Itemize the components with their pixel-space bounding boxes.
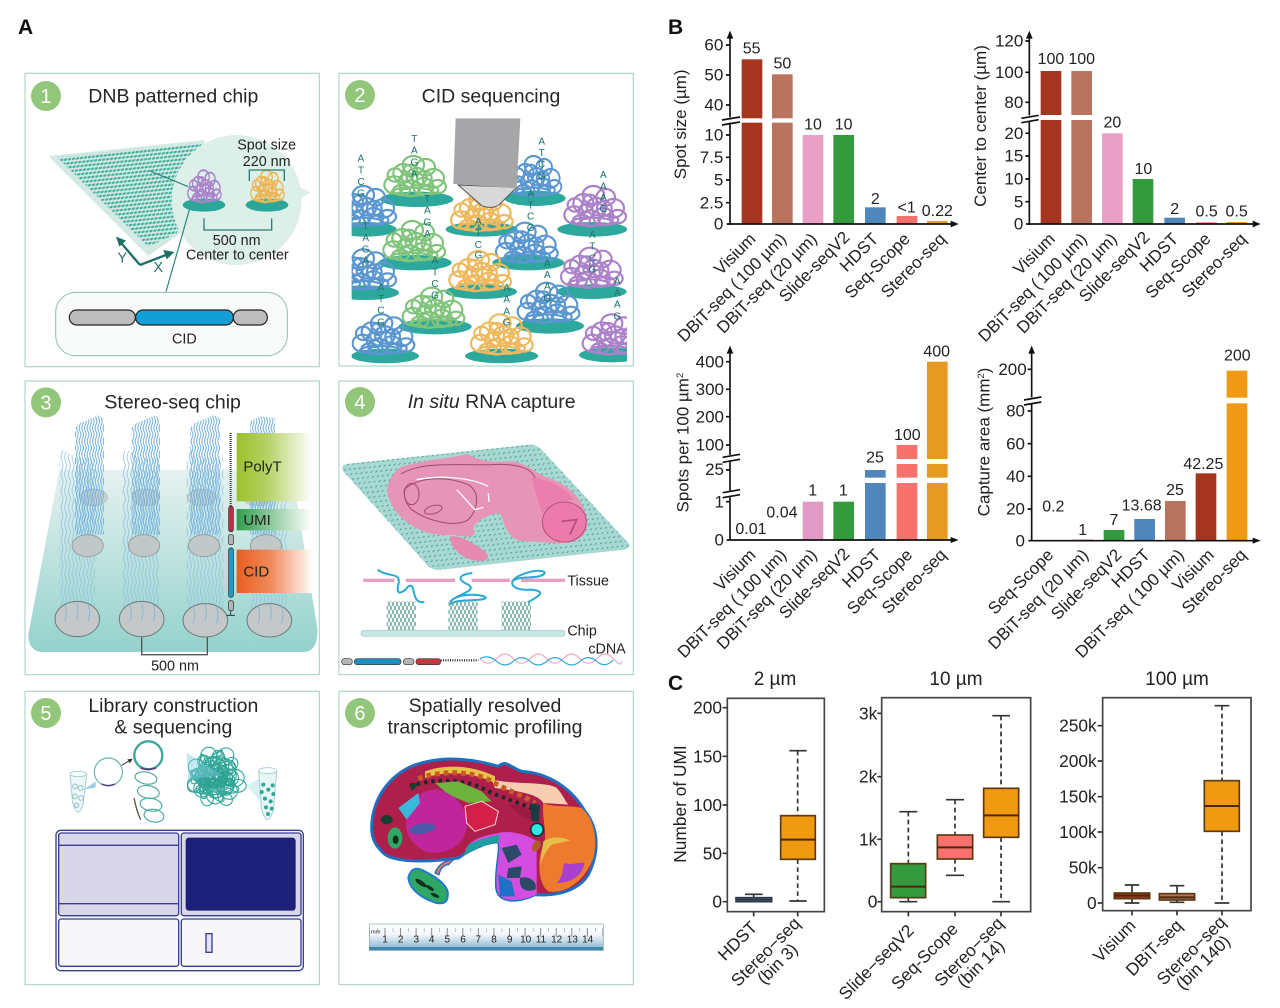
y tick labels: 60: [1006, 434, 1025, 453]
capture probes: [387, 601, 531, 631]
y tick labels: 7.5: [700, 148, 723, 167]
centre to centre label: 500 nm: [213, 233, 261, 249]
value labels: 55: [743, 41, 761, 58]
y tick labels: 2.5: [700, 193, 723, 212]
y tick labels: [1059, 716, 1097, 913]
category labels: (bin 14): [953, 936, 1008, 991]
magnified lens: [172, 135, 311, 265]
category labels: [674, 544, 950, 662]
CID oligo box: CID: [172, 331, 197, 347]
y tick labels: 5: [714, 171, 723, 190]
y tick labels: 20: [1006, 500, 1025, 519]
title: & sequencing: [114, 717, 232, 739]
y tick labels: 50: [704, 66, 723, 85]
axes: [1024, 346, 1261, 544]
value labels: 0.5: [1226, 204, 1248, 221]
DNB clusters with base letters: ATCG: [474, 217, 482, 262]
DNB clusters with base letters: TAGA: [362, 221, 370, 267]
step badge 3: 3: [40, 392, 52, 414]
category labels: HDST: [1108, 545, 1154, 592]
y tick labels: 200: [696, 407, 724, 426]
box plot: 100 um: [1059, 669, 1251, 1001]
step badge 6: [345, 698, 375, 728]
pointer lines: [150, 171, 192, 292]
value labels: 2: [1170, 201, 1179, 218]
ruler: 7: [476, 935, 482, 946]
DNB clusters with base letters: ATCG: [538, 136, 546, 183]
sequencing objective lens: [453, 118, 520, 207]
y tick labels: 0: [1087, 893, 1097, 913]
bar chart: center to center: [971, 31, 1261, 346]
DNB clusters with base letters: ATCG: [588, 230, 596, 276]
step badge 2: [345, 80, 375, 110]
Seq-Scope box: [937, 800, 973, 875]
value labels: 10: [804, 116, 822, 133]
value labels: 2: [871, 191, 880, 208]
axes: [722, 31, 959, 227]
title: In situ RNA capture: [408, 391, 576, 413]
category labels: Visium: [1169, 545, 1218, 595]
y axis title: Capture area (mm: [974, 379, 993, 516]
y tick labels: [696, 352, 724, 550]
DNB clusters with base letters: ATCG: [527, 189, 535, 234]
category labels: DBiT-seq (20 µm): [713, 229, 821, 337]
bar chart: capture area: [974, 346, 1261, 662]
mid row spots: [72, 535, 282, 557]
arrow to rolling circle: [122, 759, 133, 765]
sequencing flow cell: [56, 830, 303, 971]
ruler: 14: [582, 935, 594, 946]
panel 1: DNB patterned chip: [25, 73, 319, 367]
box plot: 2 um: [693, 669, 824, 1002]
light capture strands: [59, 450, 287, 611]
y tick labels: [995, 32, 1023, 234]
PolyT label: [237, 433, 312, 501]
strands on front spots: [65, 603, 283, 623]
orange DNB on spot: [246, 170, 288, 212]
step badge 3: [31, 387, 61, 417]
category labels: Visium: [710, 545, 759, 595]
value labels: [1042, 348, 1251, 539]
captured RNA strands: [378, 570, 545, 605]
y tick labels: 2k: [859, 767, 878, 787]
XY axes arrows: [116, 237, 174, 265]
y tick labels: 3k: [859, 703, 878, 723]
Stereo-seq bin 14 box: [984, 716, 1019, 902]
category labels: Stereo-seq: [877, 229, 949, 302]
category labels: Slide-seqV2: [1047, 545, 1125, 624]
category labels: Seq-Scope: [1142, 229, 1214, 302]
value labels: 400: [923, 344, 950, 361]
category labels: DBiT-seq (100 µm): [674, 545, 790, 662]
panel 2: CID sequencing: [331, 73, 644, 366]
title: transcriptomic profiling: [388, 717, 582, 739]
category labels: Stereo-seq: [1178, 545, 1250, 618]
y axis title: Spots per 100 µm: [673, 378, 692, 512]
category labels: HDST: [1136, 229, 1182, 276]
y tick labels: [693, 698, 722, 912]
centre to centre label: [186, 218, 289, 263]
category labels: [1089, 912, 1241, 1001]
category labels: Stereo−seq: [727, 913, 804, 990]
bars: [803, 362, 950, 540]
Stereo-seq bin 140 box: [1204, 706, 1239, 903]
y tick labels: 100: [693, 795, 722, 815]
value labels: 20: [1103, 115, 1121, 132]
DNB clusters with base letters: [331, 134, 644, 363]
category labels: DBiT-seq (20 µm): [713, 545, 821, 653]
value labels: 10: [1134, 161, 1152, 178]
value labels: 100: [1038, 51, 1064, 68]
small circle template: [94, 758, 122, 786]
value labels: 1: [839, 482, 848, 499]
category labels: [674, 228, 949, 346]
y tick labels: 60: [704, 36, 723, 55]
UMI label: UMI: [243, 512, 271, 529]
bars: [740, 59, 948, 224]
category labels: Stereo−seq: [930, 913, 1007, 990]
category labels: DBiT-seq (20 µm): [984, 545, 1092, 653]
panel letter B: B: [668, 16, 683, 39]
ruler: 12: [551, 935, 563, 946]
y tick labels: 1k: [859, 829, 878, 849]
category labels: [714, 913, 816, 1002]
panel letter C: C: [668, 672, 683, 695]
panel letter A: A: [18, 16, 33, 39]
Stereo-seq bin 3 box: [781, 751, 815, 901]
box plots: number of UMI: [670, 669, 1251, 1004]
step badge 5: [31, 698, 61, 728]
y tick labels: 50k: [1069, 858, 1097, 878]
value labels: 100: [1068, 51, 1095, 68]
DNB clusters with base letters: TAGA: [410, 134, 418, 180]
y tick labels: [998, 360, 1027, 550]
bar chart: spots per 100 um2: [673, 344, 959, 662]
rolling circle product: [134, 741, 165, 824]
bars: [1039, 71, 1247, 224]
CID oligo box: [56, 292, 287, 356]
cDNA structure: [342, 654, 622, 665]
step badge 4: [345, 387, 375, 417]
oligo structure strand: [227, 433, 235, 615]
y tick labels: 400: [696, 352, 724, 371]
tissue layer line: [363, 575, 565, 585]
axes: [1021, 31, 1261, 227]
UMI label: [237, 509, 312, 530]
bars: [1073, 371, 1250, 541]
DNB clusters with base letters: AAAG: [543, 258, 551, 304]
ruler: 13: [567, 935, 578, 946]
category labels: Stereo−seq: [1153, 912, 1230, 989]
value labels: 100: [894, 427, 921, 444]
value labels: [743, 41, 953, 220]
500 nm bracket: [142, 637, 207, 674]
value labels: 10: [835, 116, 853, 133]
value labels: <1: [898, 200, 916, 217]
tissue section: [387, 454, 587, 561]
DNB clusters with base letters: ATCG: [357, 154, 365, 199]
DNB clusters with base letters: AAAG: [599, 170, 607, 215]
centre to centre label: Center to center: [186, 247, 289, 263]
y tick labels: 10: [704, 126, 723, 145]
y tick labels: 0: [1016, 531, 1025, 550]
y tick labels: 80: [1006, 402, 1025, 421]
y tick labels: 25: [705, 460, 724, 479]
y tick labels: 100: [696, 436, 724, 455]
ruler: 11: [536, 935, 547, 946]
category labels: Seq-Scope: [984, 545, 1057, 618]
HDST box: [736, 894, 772, 902]
DNB clusters with base letters: AAAG: [613, 276, 621, 322]
y tick labels: 40: [704, 96, 723, 115]
category labels: HDST: [714, 917, 761, 965]
title: [388, 695, 582, 739]
ruler: 6: [460, 935, 466, 946]
title: DNB patterned chip: [88, 85, 259, 107]
chip surface: [28, 470, 317, 652]
subplot title: 2 µm: [754, 669, 796, 690]
category labels: Visium: [1010, 229, 1059, 279]
bar chart: spot size: [671, 31, 959, 346]
category labels: Stereo-seq: [878, 545, 950, 618]
value labels: 25: [866, 450, 884, 467]
y axis title: ): [974, 368, 993, 373]
value labels: 1: [808, 482, 817, 499]
chip surface: [48, 140, 205, 256]
step badge 6: 6: [354, 703, 366, 725]
cDNA label: cDNA: [588, 641, 626, 657]
spatial embryo map: [372, 759, 596, 900]
ruler: 1: [382, 935, 388, 946]
category labels: Slide−seqV2: [835, 920, 918, 1004]
CID label: [237, 550, 313, 593]
spot size label: 220 nm: [243, 154, 291, 170]
subplot title: 10 µm: [929, 669, 983, 690]
CID label: CID: [243, 564, 269, 581]
category labels: HDST: [836, 229, 882, 276]
category labels: (bin 140): [1172, 931, 1234, 993]
y tick labels: 0: [712, 892, 722, 912]
category labels: Visium: [1089, 915, 1139, 966]
title: Spatially resolved: [409, 695, 561, 717]
y tick labels: 5: [1014, 192, 1023, 211]
value labels: 42.25: [1183, 456, 1223, 473]
axis label Y: Y: [118, 251, 128, 267]
spot size label: [237, 137, 296, 181]
DBiT-seq box: [1159, 886, 1195, 902]
axes: [723, 346, 959, 543]
ruler: 9: [507, 935, 513, 946]
y tick labels: 50: [703, 843, 722, 863]
title: [88, 695, 258, 739]
ruler: mm: [371, 929, 381, 935]
y axis title: 2: [976, 373, 986, 379]
value labels: 0.04: [766, 505, 798, 522]
value labels: 0.5: [1196, 204, 1218, 221]
value labels: 50: [773, 56, 791, 73]
y axis title: Number of UMI: [670, 745, 690, 863]
ruler: [369, 924, 603, 950]
back row spots: [79, 489, 271, 506]
Slide-seqV2 box: [891, 812, 926, 902]
y tick labels: 40: [1006, 467, 1025, 486]
DNB ball: [183, 742, 251, 811]
y tick labels: 1: [715, 492, 724, 511]
value labels: 1: [1078, 522, 1087, 539]
category labels: [835, 913, 1019, 1004]
chip bar: [361, 630, 565, 636]
y tick labels: 200: [998, 360, 1027, 379]
category labels: [984, 545, 1250, 662]
ruler: 2: [398, 935, 404, 946]
dense capture strands: [75, 415, 277, 535]
y tick labels: 0: [868, 892, 877, 912]
value labels: 0.01: [735, 521, 767, 538]
ruler: 5: [445, 935, 451, 946]
category labels: Stereo-seq: [1178, 229, 1250, 302]
category labels: DBiT-seq: [1122, 915, 1186, 980]
DNB clusters with base letters: ATCG: [377, 282, 385, 328]
panel 3: Stereo-seq chip: [25, 381, 319, 675]
y axis title: Spot size (µm): [671, 69, 690, 179]
chip with spots: [342, 445, 629, 570]
value labels: 13.68: [1122, 498, 1162, 515]
y tick labels: 20: [1004, 124, 1023, 143]
panel 6: spatially resolved transcriptomic profiling: [339, 691, 633, 985]
ruler: 3: [414, 935, 420, 946]
step badge 2: 2: [354, 85, 366, 107]
panel 4: in situ RNA capture: [339, 381, 633, 675]
category labels: Slide-seqV2: [775, 544, 853, 623]
y tick labels: 10: [1004, 170, 1023, 189]
purple DNB on spot: [183, 170, 225, 212]
axis label X: X: [154, 260, 164, 276]
right tube: [247, 768, 277, 820]
y tick labels: 300: [696, 380, 724, 399]
category labels: HDST: [838, 545, 884, 592]
y tick labels: 0: [1014, 215, 1023, 234]
step badge 4: 4: [354, 392, 366, 414]
step badge 1: 1: [40, 86, 52, 108]
category labels: DBiT-seq (100 µm): [974, 229, 1091, 346]
category labels: Seq-Scope: [887, 919, 962, 993]
value labels: 0.2: [1042, 499, 1065, 516]
category labels: DBiT-seq (100 µm): [674, 229, 790, 346]
y tick labels: 80: [1004, 93, 1023, 112]
y tick labels: 150: [693, 746, 722, 766]
y tick labels: 100: [995, 63, 1023, 82]
DNB clusters with base letters: AAAG: [503, 283, 511, 328]
title: CID sequencing: [422, 85, 560, 107]
PolyT label: PolyT: [243, 459, 282, 476]
value labels: [1038, 51, 1248, 221]
chip label: Chip: [567, 623, 597, 639]
ruler: 10: [520, 935, 532, 946]
category labels: DBiT-seq (100 µm): [1071, 545, 1188, 662]
title: Library construction: [88, 695, 258, 717]
category labels: DBiT-seq (20 µm): [1013, 229, 1121, 337]
category labels: Seq-Scope: [843, 545, 916, 618]
y axis title: Center to center (µm): [971, 45, 990, 207]
category labels: [974, 228, 1250, 346]
y tick labels: 200k: [1059, 751, 1097, 771]
category labels: Slide-seqV2: [775, 228, 853, 306]
y tick labels: 200: [693, 698, 722, 718]
category labels: (bin 3): [753, 939, 802, 988]
y tick labels: 120: [995, 32, 1023, 51]
value labels: 25: [1166, 482, 1184, 499]
y tick labels: 0: [715, 531, 724, 550]
y tick labels: 0: [714, 215, 723, 234]
ruler: 8: [491, 935, 497, 946]
value labels: [735, 344, 950, 538]
tissue label: Tissue: [567, 573, 609, 589]
box plot: 10 um: [835, 669, 1031, 1004]
y tick labels: 250k: [1059, 716, 1097, 736]
Visium box: [1114, 885, 1150, 903]
subplot title: 100 µm: [1145, 669, 1209, 690]
step badge 5: 5: [40, 703, 52, 725]
y tick labels: 100k: [1059, 822, 1097, 842]
y tick labels: 15: [1004, 147, 1023, 166]
y tick labels: [859, 703, 878, 912]
500 nm bracket: 500 nm: [151, 658, 199, 674]
category labels: Visium: [710, 229, 759, 279]
ruler: 4: [429, 935, 435, 946]
value labels: 0.22: [922, 203, 953, 220]
value labels: 200: [1224, 348, 1251, 365]
category labels: Seq-Scope: [841, 229, 914, 302]
value labels: 7: [1110, 512, 1119, 529]
DNB clusters with base letters: ATCG: [431, 256, 439, 302]
left tube: [70, 771, 96, 812]
title: Stereo-seq chip: [104, 392, 241, 414]
panel 5: library construction and sequencing: [25, 691, 319, 985]
DNB clusters with base letters: TAGA: [423, 194, 431, 240]
y tick labels: [700, 36, 723, 234]
y axis title: 2: [675, 373, 685, 378]
embryo lower lobe: [408, 869, 448, 903]
front row spots: [55, 601, 292, 637]
spot size label: Spot size: [237, 137, 296, 153]
category labels: Slide-seqV2: [1075, 228, 1153, 306]
y tick labels: 150k: [1059, 787, 1097, 807]
step badge 1: [31, 81, 61, 111]
